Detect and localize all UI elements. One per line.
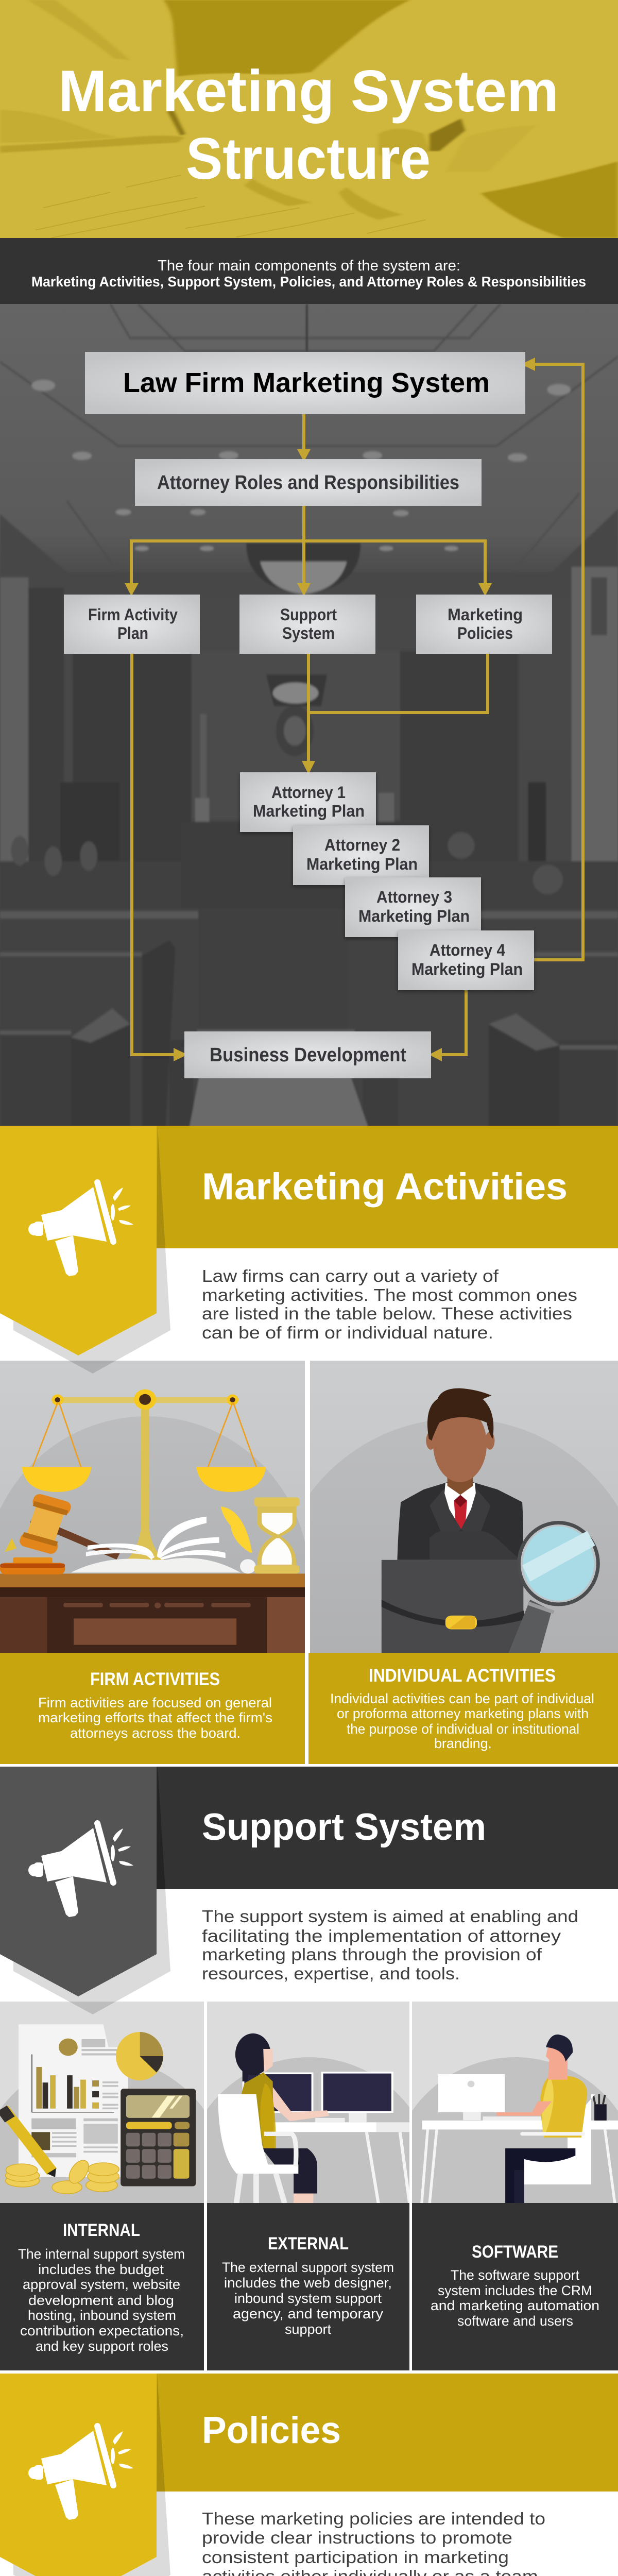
title: Structure — [186, 126, 431, 192]
box: marketing policies — [416, 595, 552, 654]
box: law firm marketing system — [85, 352, 525, 414]
caption: external: support — [285, 2321, 331, 2337]
caption: external: agency, and temporary — [233, 2306, 384, 2321]
box: attorney 3 marketing plan: Marketing Plan — [358, 907, 470, 925]
connector: firm activity to business development — [132, 654, 175, 1055]
box: attorney 4 marketing plan — [398, 930, 534, 990]
caption: internal: development and blog — [28, 2293, 174, 2308]
caption: software: The software support — [451, 2267, 579, 2283]
text block: policies intro: These marketing policies are intended to — [202, 2509, 545, 2528]
title: Marketing System — [58, 59, 559, 124]
section band: support system — [157, 1767, 618, 1889]
box: support system: Support — [280, 605, 337, 624]
caption: internal: The internal support system — [18, 2246, 185, 2262]
section band: marketing activities — [157, 1126, 618, 1248]
text block: support system intro: marketing plans through the provision of — [202, 1945, 542, 1964]
connector: attorney 4 to business development — [440, 990, 466, 1055]
text block: marketing activities intro — [202, 1266, 577, 1342]
courtroom photo background, grayscale — [0, 304, 618, 1128]
caption: individual activities — [308, 1653, 618, 1764]
caption: internal: approval system, website — [23, 2277, 180, 2292]
box: attorney 4 marketing plan: Attorney 4 — [430, 941, 505, 959]
section band: policies — [157, 2374, 618, 2492]
section band: support system: Support System — [202, 1806, 486, 1848]
caption: internal: hosting, inbound system — [28, 2308, 176, 2323]
caption: internal: and key support roles — [36, 2338, 168, 2354]
section band: marketing activities: Marketing Activities — [202, 1166, 568, 1208]
box: attorney 3 marketing plan — [345, 877, 481, 937]
intro band: Marketing Activities, Support System, Policies, and Attorney Roles & Responsibilities — [31, 274, 586, 290]
caption: software: software and users — [457, 2313, 573, 2329]
arrow: system to attorney roles — [302, 414, 305, 451]
box: attorney 3 marketing plan: Attorney 3 — [376, 888, 452, 906]
box: attorney 4 marketing plan: Marketing Plan — [411, 960, 523, 978]
text block: marketing activities intro: can be of firm or individual nature. — [202, 1323, 493, 1342]
caption: internal: includes the budget — [38, 2262, 164, 2277]
box: support system — [239, 595, 375, 654]
text block: policies intro — [202, 2509, 545, 2576]
text block: support system intro: resources, expertise, and tools. — [202, 1964, 460, 1983]
caption: software: SOFTWARE — [472, 2242, 558, 2262]
text block: policies intro: provide clear instructions to promote — [202, 2528, 512, 2547]
caption: software: system includes the CRM — [438, 2283, 592, 2298]
box: support system: System — [282, 624, 335, 642]
caption: individual activities: or proforma attorney marketing plans with — [337, 1706, 589, 1721]
text block: marketing activities intro: are listed in the table below. These activities — [202, 1304, 572, 1323]
caption: software: and marketing automation — [431, 2298, 599, 2313]
caption: individual activities: Individual activities can be part of individual — [330, 1691, 594, 1706]
caption: individual activities: the purpose of individual or institutional — [347, 1721, 579, 1737]
panel: firm activities illustration, scales, gavel, book — [0, 1361, 305, 1653]
caption: internal: contribution expectations, — [20, 2323, 184, 2338]
box: attorney 2 marketing plan: Marketing Plan — [306, 855, 418, 873]
caption: individual activities: INDIVIDUAL ACTIVITIES — [369, 1666, 556, 1686]
panel: individual activities illustration, attorney with briefcase and magnifier — [310, 1361, 618, 1653]
intro band — [0, 238, 618, 304]
box: attorney 2 marketing plan — [293, 825, 429, 885]
box: attorney 1 marketing plan: Marketing Plan — [253, 802, 365, 820]
caption: firm activities: Firm activities are focused on general — [38, 1695, 272, 1710]
caption: external: The external support system — [222, 2260, 394, 2275]
text block: support system intro — [202, 1907, 578, 1983]
flowchart connectors and arrows — [131, 364, 583, 1055]
ribbon: policies, megaphone — [0, 2374, 170, 2576]
text block: support system intro: facilitating the implementation of attorney — [202, 1926, 561, 1945]
box: marketing policies: Policies — [457, 624, 513, 642]
caption: firm activities: attorneys across the board. — [70, 1725, 241, 1741]
panel: internal illustration, reports, calculator, coins — [0, 2002, 204, 2203]
box: attorney 1 marketing plan: Attorney 1 — [271, 783, 346, 802]
arrowheads — [125, 358, 535, 1061]
header photo: hands signing a document, yellow duotone — [0, 0, 618, 238]
caption: individual activities: branding. — [434, 1736, 492, 1751]
ribbon: support system, megaphone — [0, 1767, 170, 2014]
feedback loop: attorney 4 back to system — [534, 364, 583, 960]
box: attorney roles and responsibilities: Attorney Roles and Responsibilities — [157, 472, 459, 494]
box: business development: Business Development — [210, 1044, 406, 1066]
box: attorney 2 marketing plan: Attorney 2 — [324, 836, 400, 854]
caption: internal — [0, 2203, 204, 2370]
caption: firm activities — [0, 1653, 305, 1764]
panel: software illustration, man at computer — [412, 2002, 618, 2203]
caption: external: inbound system support — [234, 2291, 382, 2306]
caption: external: includes the web designer, — [224, 2275, 392, 2291]
caption: firm activities: marketing efforts that affect the firm's — [38, 1710, 272, 1725]
connector: attorney roles to the three plans — [131, 506, 485, 586]
box: marketing policies: Marketing — [448, 605, 523, 624]
caption: software — [412, 2203, 618, 2370]
box: attorney 1 marketing plan — [240, 772, 376, 832]
title — [58, 59, 559, 192]
box: firm activity plan: Firm Activity — [88, 605, 178, 624]
box: attorney roles and responsibilities — [135, 459, 482, 506]
text block: marketing activities intro: marketing activities. The most common ones — [202, 1285, 577, 1304]
caption: external: EXTERNAL — [268, 2234, 349, 2253]
text block: marketing activities intro: Law firms can carry out a variety of — [202, 1266, 499, 1285]
caption: firm activities: FIRM ACTIVITIES — [90, 1669, 220, 1689]
box: firm activity plan — [64, 595, 200, 654]
caption: internal: INTERNAL — [63, 2221, 140, 2240]
box: firm activity plan: Plan — [117, 624, 148, 642]
box: business development — [184, 1031, 431, 1078]
caption: external — [207, 2203, 409, 2370]
text block: policies intro: consistent participation in marketing — [202, 2548, 509, 2567]
ribbon: marketing activities, megaphone — [0, 1126, 170, 1374]
section band: policies: Policies — [202, 2410, 341, 2451]
text block: support system intro: The support system is aimed at enabling and — [202, 1907, 578, 1926]
intro band: The four main components of the system are: — [158, 258, 460, 274]
connector: support and policies to attorney plans — [308, 654, 488, 762]
panel: external illustration, woman at two monitors — [207, 2002, 409, 2203]
box: law firm marketing system: Law Firm Marketing System — [123, 367, 490, 398]
